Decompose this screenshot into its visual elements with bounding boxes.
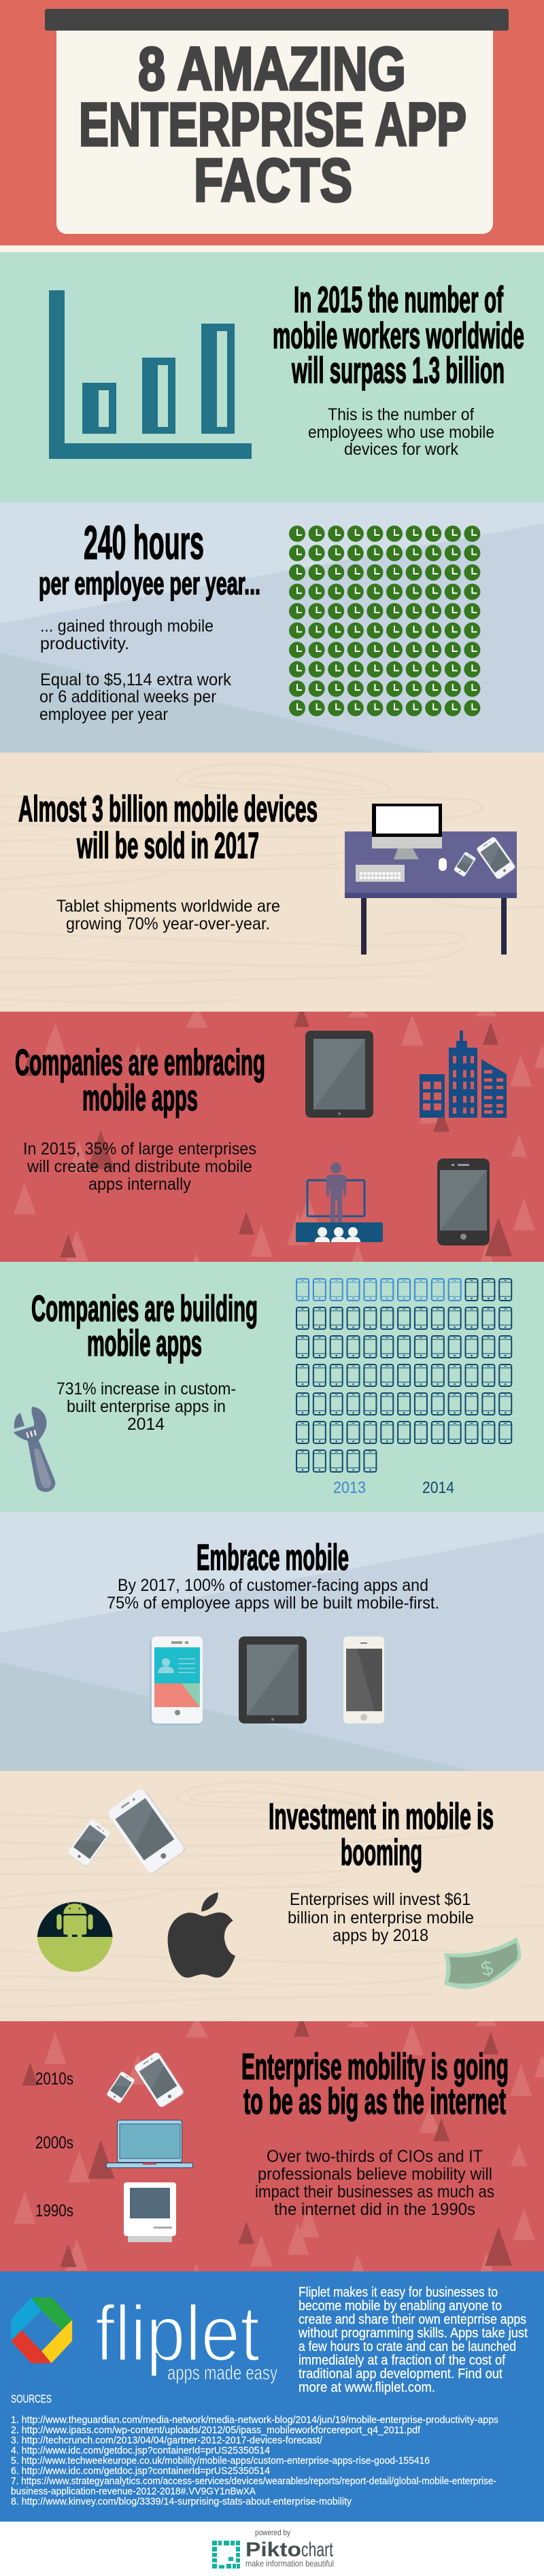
text: 731 percent: 2014 <box>127 1415 165 1434</box>
text: two-thirds: impact their businesses as much as <box>255 2182 494 2201</box>
heading: embracing <box>15 1042 265 1118</box>
text: productivity: Equal to $5,114 extra work <box>40 670 231 689</box>
panel: fliplet <box>0 2271 544 2522</box>
icon: bar chart <box>49 290 252 459</box>
sources: business-application-revenue-2012-2018#.VV9GY1nBwXA <box>11 2486 256 2497</box>
chart: phone pictogram <box>296 1279 511 1472</box>
text: tablet shipments: Tablet shipments worldwide are <box>56 897 280 916</box>
text: 731 percent: built enterprise apps in <box>67 1397 226 1416</box>
text: about fliplet: immediately at a fraction of the cost of <box>299 2353 505 2368</box>
heading: mobile workers <box>273 279 524 391</box>
logo wordmark: fliplet <box>95 2289 260 2377</box>
text: 35 percent: apps internally <box>88 1175 191 1194</box>
icon: dollar bill <box>444 1937 521 1989</box>
text: 61 billion: Enterprises will invest $61 <box>290 1890 471 1909</box>
icon: desktop computer <box>124 2182 176 2242</box>
heading: 3 billion <box>18 789 318 866</box>
sources: 2. http://www.ipass.com/wp-content/uploads/2012/05/ipass_mobileworkforcereport_q4_2011.pdf <box>11 2424 421 2436</box>
panel: investment <box>0 1771 544 2022</box>
label: 2010s: 2010s <box>35 2070 73 2089</box>
sources: 3. http://techcrunch.com/2013/04/04/gartner-2012-2017-devices-forecast/ <box>11 2435 323 2446</box>
panel: 240 hours <box>0 502 544 774</box>
footer: powered by piktochart: powered by <box>255 2528 290 2537</box>
heading: embracing: Companies are embracing <box>15 1042 265 1083</box>
panel: embrace mobile <box>0 1512 544 1784</box>
text: about fliplet <box>298 2285 528 2395</box>
panel: header <box>0 0 544 252</box>
header dark bar <box>45 9 509 31</box>
footer: powered by piktochart <box>0 2522 544 2576</box>
title <box>79 35 466 215</box>
title: 8 AMAZING <box>138 35 406 103</box>
sources: 5. http://www.techweekeurope.co.uk/mobility/mobile-apps/custom-enterprise-apps-rise-good-155416 <box>11 2455 430 2467</box>
heading: building <box>31 1288 258 1364</box>
icon: iphone <box>343 1636 384 1723</box>
text: 731 percent <box>56 1379 236 1434</box>
text: 731 percent: 731% increase in custom- <box>56 1379 236 1398</box>
text: two-thirds: Over two-thirds of CIOs and IT <box>267 2147 483 2166</box>
logo wordmark: piktochart: Pikto <box>245 2539 301 2561</box>
text: productivity: employee per year <box>39 705 168 724</box>
tagline: apps made easy <box>167 2362 277 2384</box>
icon: phone and tablet <box>67 1787 188 1876</box>
icon: wrench <box>14 1407 55 1492</box>
text: two-thirds <box>255 2147 494 2219</box>
heading: building: mobile apps <box>87 1323 202 1364</box>
text: productivity: productivity. <box>40 634 129 653</box>
icon: android <box>37 1902 113 1972</box>
header card <box>56 20 493 234</box>
text: about fliplet: Fliplet makes it easy for businesses to <box>299 2285 498 2300</box>
panel: embracing apps <box>0 996 544 1268</box>
text: productivity <box>39 617 231 724</box>
heading: embracing: mobile apps <box>82 1078 198 1118</box>
icon: phone <box>437 1158 490 1246</box>
heading: investment: booming <box>341 1832 422 1873</box>
sources: 6. http://www.idc.com/getdoc.jsp?containerId=prUS25350514 <box>11 2465 270 2477</box>
heading: 240 hours <box>39 516 260 601</box>
chart: clock pictogram <box>289 526 480 717</box>
sources <box>11 2392 498 2507</box>
text: productivity: or 6 additional weeks per <box>39 687 216 706</box>
icon: apple <box>168 1892 235 1978</box>
text: employees: employees who use mobile <box>308 423 494 442</box>
text: 35 percent: will create and distribute mobile <box>27 1157 252 1176</box>
logo wordmark: piktochart: chart <box>301 2539 333 2561</box>
text: about fliplet: traditional app development. Find out <box>299 2367 503 2382</box>
label: 1990s: 1990s <box>35 2201 73 2220</box>
panel: devices sold <box>0 753 544 1012</box>
panel: mobile workers <box>0 252 544 755</box>
icon: dollar bill: $ <box>479 1957 496 1981</box>
title: FACTS <box>194 147 352 215</box>
icon: buildings <box>420 1031 507 1118</box>
sources: 7. https://www.strategyanalytics.com/access-services/devices/wearables/reports/report-detail/global-mobile-enterprise- <box>11 2475 496 2487</box>
label: 2000s: 2000s <box>35 2133 73 2152</box>
text: employees <box>308 405 494 459</box>
heading: embrace mobile: Embrace mobile <box>197 1537 349 1578</box>
icon: app phone <box>150 1636 203 1725</box>
icon: presenter <box>296 1163 383 1242</box>
text: about fliplet: become mobile by enabling anyone to <box>299 2299 502 2314</box>
icon: desk <box>345 804 517 955</box>
text: mobile-first <box>107 1576 439 1613</box>
text: about fliplet: more at www.fliplet.com. <box>299 2380 435 2395</box>
heading: 3 billion: will be sold in 2017 <box>76 825 259 866</box>
text: 61 billion: billion in enterprise mobile <box>288 1908 474 1927</box>
text: employees: This is the number of <box>328 405 474 424</box>
icon: piktochart logo <box>212 2541 240 2569</box>
text: two-thirds: the internet did in the 1990s <box>274 2200 475 2219</box>
icon: tablet <box>239 1636 307 1723</box>
icon: phone and tablet <box>106 2050 186 2109</box>
text: 61 billion: apps by 2018 <box>333 1926 428 1945</box>
text: mobile-first: 75% of employee apps will be built mobile-first. <box>107 1594 439 1613</box>
text: mobile-first: By 2017, 100% of customer-facing apps and <box>118 1576 428 1595</box>
heading: building: Companies are building <box>31 1288 258 1329</box>
heading: 240 hours: per employee per year... <box>39 566 260 601</box>
heading: enterprise mobility <box>241 2046 509 2122</box>
heading: 240 hours: 240 hours <box>84 516 204 569</box>
text: about fliplet: without programming skills. Apps take just <box>298 2326 528 2341</box>
heading: investment <box>269 1796 494 1873</box>
icon: laptop <box>106 2120 193 2167</box>
legend: 2013: 2013 <box>333 1479 366 1497</box>
legend: 2014: 2014 <box>422 1479 454 1497</box>
text: two-thirds: professionals believe mobility will <box>258 2165 492 2184</box>
text: tablet shipments <box>56 897 280 933</box>
icon: fliplet logo <box>11 2297 72 2363</box>
text: about fliplet: a few hours to crate and can be launched <box>299 2339 516 2354</box>
text: productivity: ... gained through mobile <box>40 617 214 636</box>
icon: tablet <box>305 1031 373 1118</box>
text: tablet shipments: growing 70% year-over-year. <box>66 914 270 933</box>
sources: SOURCES <box>11 2392 52 2405</box>
sources: 4. http://www.idc.com/getdoc.jsp?containerId=prUS25350514 <box>11 2445 270 2456</box>
panel: as big as the internet <box>0 2006 544 2278</box>
text: 61 billion <box>288 1890 474 1945</box>
tagline: make information beautiful <box>245 2558 334 2569</box>
text: 35 percent: In 2015, 35% of large enterprises <box>23 1139 256 1158</box>
sources: 1. http://www.theguardian.com/media-network/media-network-blog/2014/jun/19/mobile-enterprise-productivity-apps <box>11 2414 498 2426</box>
text: employees: devices for work <box>344 440 458 459</box>
sources: 8. http://www.kinvey.com/blog/3339/14-surprising-stats-about-enterprise-mobility <box>11 2496 352 2507</box>
panel: building apps <box>0 1262 544 1764</box>
text: 35 percent <box>23 1139 256 1194</box>
